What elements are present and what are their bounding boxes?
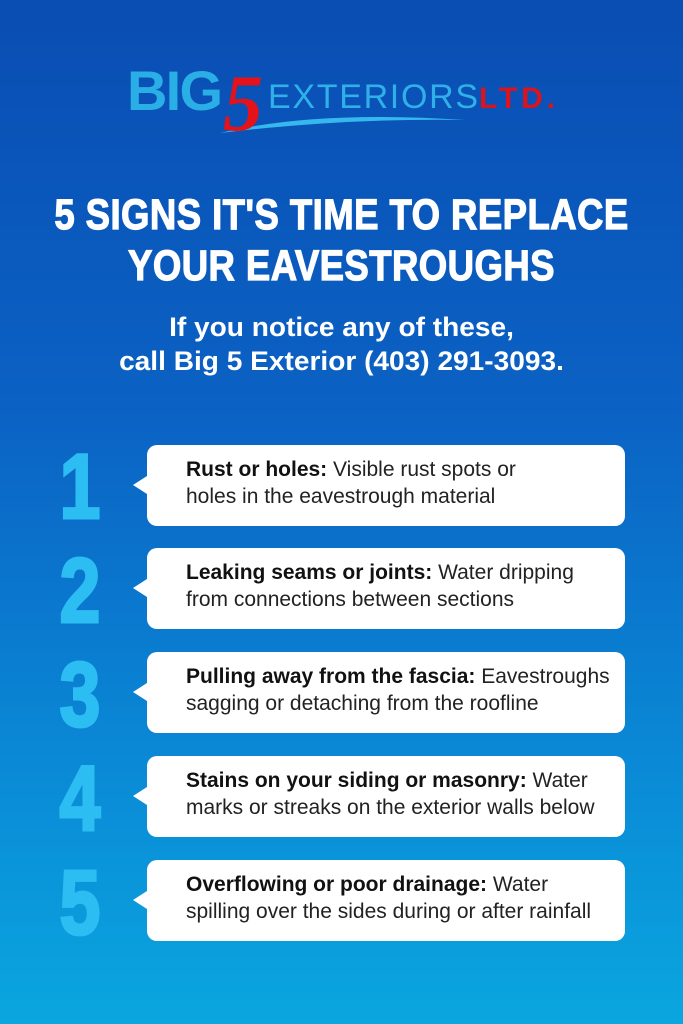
number 2: 2 — [60, 540, 100, 642]
card 2 — [147, 548, 625, 629]
title — [54, 191, 629, 290]
title: YOUR EAVESTROUGHS — [128, 242, 555, 290]
card 3: sagging or detaching from the roofline — [186, 692, 539, 715]
card 2: Leaking seams or joints: Water dripping — [186, 561, 574, 584]
logo — [127, 59, 555, 138]
number 5: 5 — [60, 852, 100, 954]
card 5 — [147, 860, 625, 941]
logo: BIG — [127, 59, 223, 122]
subtitle — [119, 312, 564, 376]
card 1: Rust or holes: Visible rust spots or — [186, 458, 516, 481]
card 3 — [147, 652, 625, 733]
card 1 — [147, 445, 625, 526]
logo: EXTERIORS — [268, 78, 478, 116]
number 1: 1 — [60, 436, 100, 538]
card 4 — [147, 756, 625, 837]
card 4: Stains on your siding or masonry: Water — [186, 769, 588, 792]
card 5: spilling over the sides during or after rainfall — [186, 900, 591, 923]
number 3: 3 — [60, 644, 100, 746]
logo: LTD. — [479, 82, 555, 115]
card 1: holes in the eavestrough material — [186, 485, 495, 508]
card 3: Pulling away from the fascia: Eavestroughs — [186, 665, 610, 688]
subtitle: call Big 5 Exterior (403) 291-3093. — [119, 346, 564, 376]
card 2: from connections between sections — [186, 588, 514, 611]
title: 5 SIGNS IT'S TIME TO REPLACE — [54, 191, 629, 239]
subtitle: If you notice any of these, — [169, 312, 514, 342]
number 4: 4 — [60, 748, 100, 850]
card 4: marks or streaks on the exterior walls below — [186, 796, 594, 819]
card 5: Overflowing or poor drainage: Water — [186, 873, 548, 896]
